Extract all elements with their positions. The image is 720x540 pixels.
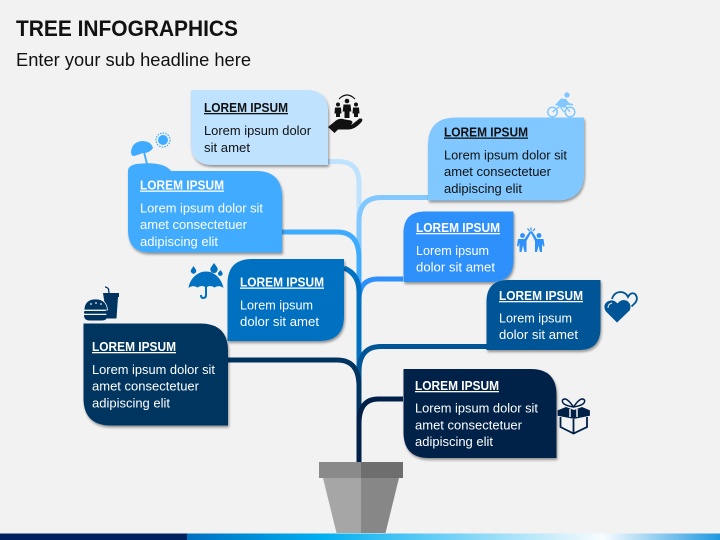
panel: upper left blue: Lorem ipsum dolor sit: [140, 200, 263, 216]
panel: right bright blue: LOREM IPSUM: [416, 220, 500, 235]
panel: centre left mid blue: dolor sit amet: [240, 314, 319, 329]
panel: centre left mid blue: [228, 259, 344, 341]
panel: top centre light blue: LOREM IPSUM: [204, 100, 288, 115]
icon: beach umbrella and sun: [131, 133, 170, 164]
panel: lower left navy: [84, 324, 228, 426]
panel: upper left blue: amet consectetuer: [140, 217, 248, 232]
panel: lower left navy: Lorem ipsum dolor sit: [92, 362, 215, 377]
icon: umbrella with rain: [188, 263, 224, 298]
panel: right bright blue: dolor sit amet: [416, 260, 495, 274]
icon: people in hand: [328, 95, 362, 133]
panel: upper right sky blue: adipiscing elit: [444, 181, 522, 196]
panel: lower right dark navy: adipiscing elit: [415, 434, 493, 449]
subtitle: Enter your sub headline here: [16, 50, 251, 70]
panel: lower right dark navy: Lorem ipsum dolor sit: [415, 400, 538, 416]
panel: right steel blue: Lorem ipsum: [499, 310, 572, 326]
panel: lower left navy: amet consectetuer: [92, 378, 200, 394]
icon: hearts: [604, 292, 637, 323]
panel: upper right sky blue: [428, 118, 584, 200]
tree stem and branches: [228, 162, 487, 462]
panel: upper right sky blue: amet consectetuer: [444, 164, 552, 179]
panel: upper right sky blue: Lorem ipsum dolor sit: [444, 148, 567, 162]
panel: upper left blue: [128, 163, 282, 252]
title: TREE INFOGRAPHICS: [16, 16, 238, 41]
panel: top centre light blue: Lorem ipsum dolor: [204, 123, 312, 138]
icon: high five: [517, 228, 544, 252]
bottom gradient bar: [0, 534, 720, 540]
panel: upper left blue: adipiscing elit: [140, 234, 218, 249]
panel: centre left mid blue: Lorem ipsum: [240, 298, 313, 312]
flower pot: [319, 462, 403, 533]
panel: lower left navy: adipiscing elit: [92, 396, 170, 410]
panel: lower right dark navy: LOREM IPSUM: [415, 378, 499, 393]
panel: lower right dark navy: [404, 369, 556, 458]
panel: right steel blue: dolor sit amet: [499, 327, 578, 342]
panel: top centre light blue: sit amet: [204, 140, 250, 155]
panel: right bright blue: [404, 212, 514, 282]
panel: lower right dark navy: amet consectetuer: [415, 418, 523, 432]
icon: burger and drink: [84, 287, 119, 320]
icon: gift box: [558, 399, 589, 434]
panel: centre left mid blue: LOREM IPSUM: [240, 274, 324, 290]
panel: right steel blue: [486, 280, 600, 350]
panel: upper left blue: LOREM IPSUM: [140, 178, 224, 192]
panel: upper right sky blue: LOREM IPSUM: [444, 124, 528, 140]
panel: right steel blue: LOREM IPSUM: [499, 288, 583, 303]
panel: right bright blue: Lorem ipsum: [416, 243, 489, 258]
panel: lower left navy: LOREM IPSUM: [92, 339, 176, 354]
panel: top centre light blue: [191, 90, 328, 165]
icon: cyclist: [548, 92, 575, 117]
